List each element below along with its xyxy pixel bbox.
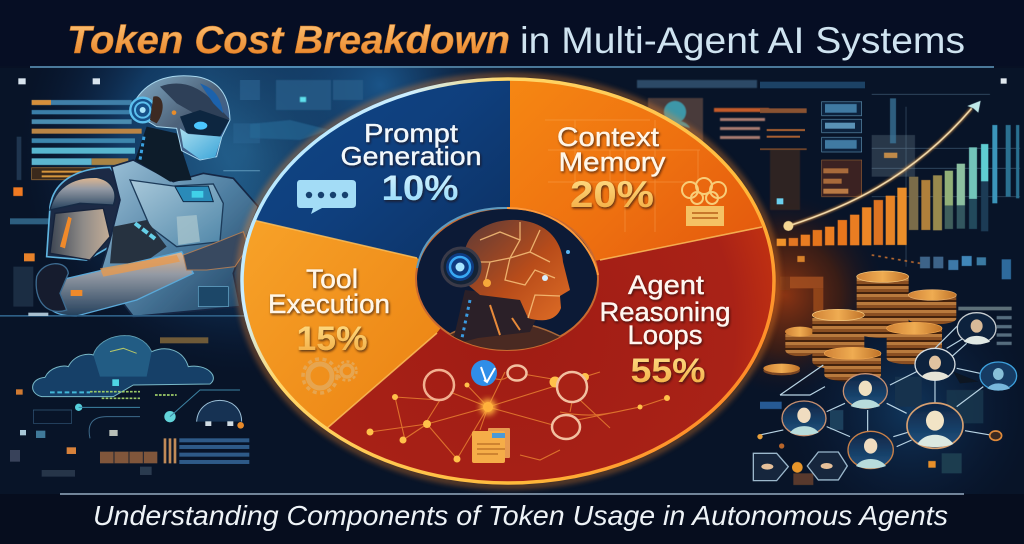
robot hand bbox=[183, 232, 248, 270]
coin stack: front bbox=[824, 347, 881, 382]
robot helmet bbox=[137, 76, 230, 160]
label: context memory bbox=[557, 122, 666, 215]
head shoulders bbox=[449, 325, 561, 350]
top centre tech panel bbox=[250, 80, 363, 140]
loop arrows ring bbox=[424, 370, 454, 400]
folder icon bbox=[472, 428, 510, 463]
label: agent reasoning loops: Agent bbox=[628, 270, 705, 300]
label: tool execution: Execution bbox=[268, 289, 390, 319]
pie rim bbox=[242, 79, 774, 483]
robot chest detail bbox=[130, 180, 223, 247]
hub glow bbox=[480, 399, 496, 415]
robot ear disc bbox=[130, 98, 155, 122]
agent avatar 3 bbox=[980, 362, 1017, 391]
rising arrow bbox=[783, 101, 981, 231]
context memory faint grid bbox=[545, 120, 700, 232]
coin stack: back tall bbox=[857, 271, 909, 338]
check badge bbox=[471, 360, 497, 386]
coin stacks bbox=[763, 271, 956, 382]
pie chart bbox=[232, 70, 782, 492]
cloud outline bbox=[33, 336, 213, 397]
robot neck bbox=[135, 127, 192, 182]
coin stack: middle left bbox=[812, 309, 864, 369]
network nodes bbox=[366, 373, 670, 462]
robot forearm bbox=[43, 252, 193, 316]
network links bbox=[760, 323, 990, 447]
centre hole with head bbox=[416, 208, 598, 360]
cloud network diagram bbox=[0, 313, 260, 477]
growth chart panel bbox=[760, 78, 1020, 279]
robot back arm bbox=[47, 167, 130, 260]
label: agent reasoning loops bbox=[600, 270, 730, 390]
robot illustration bbox=[36, 76, 258, 317]
agent avatar 6 bbox=[848, 431, 893, 469]
hexagon nodes bbox=[753, 452, 847, 481]
agent avatar 5 bbox=[782, 401, 826, 436]
coin stack: back right bbox=[908, 290, 956, 325]
top right tech panel bbox=[637, 80, 800, 210]
slice: tool execution bbox=[244, 221, 440, 428]
label: tool execution bbox=[268, 264, 390, 358]
robot shoulder bbox=[50, 177, 115, 210]
slice: agent reasoning loops bbox=[328, 226, 772, 482]
label: prompt generation: Prompt bbox=[364, 118, 459, 148]
left dashboard panel bbox=[10, 78, 260, 307]
robot torso bbox=[100, 160, 258, 317]
ring nodes bbox=[508, 366, 587, 439]
agent avatar 4 bbox=[843, 374, 887, 408]
title bbox=[67, 19, 965, 62]
coin stack: far left bbox=[785, 327, 815, 356]
label: context memory: Context bbox=[557, 122, 660, 152]
agent avatar 2 bbox=[915, 348, 955, 380]
label: context memory: 20% bbox=[570, 174, 654, 215]
reasoning loop network bbox=[366, 360, 670, 463]
hexagon node marks bbox=[761, 463, 833, 470]
pie slices bbox=[244, 80, 772, 482]
bars bbox=[777, 125, 1019, 246]
icon: context memory bbox=[682, 178, 726, 225]
single coin bbox=[763, 364, 800, 375]
label: prompt generation: 10% bbox=[382, 169, 458, 208]
chart frame bbox=[872, 94, 1020, 267]
head and brain bbox=[462, 220, 570, 320]
subtitle: Understanding Components of Token Usage in Autonomous Agents bbox=[93, 500, 948, 531]
label: agent reasoning loops: 55% bbox=[630, 352, 706, 390]
title: in Multi-Agent AI Systems bbox=[520, 20, 965, 61]
agent network bbox=[753, 313, 1017, 481]
robot face visor bbox=[180, 110, 229, 137]
dashboard widgets bbox=[760, 82, 865, 204]
label: tool execution: 15% bbox=[296, 320, 368, 358]
pie glow bbox=[239, 76, 777, 486]
title: Token Cost Breakdown bbox=[67, 19, 510, 62]
label: context memory: Memory bbox=[558, 147, 666, 177]
label: prompt generation: Generation bbox=[340, 141, 482, 171]
right lower panel backdrop bbox=[760, 277, 1012, 485]
label: tool execution: Tool bbox=[306, 264, 358, 294]
slice: context memory bbox=[510, 80, 762, 261]
agent avatar 1 bbox=[957, 313, 996, 344]
icon: chat bubble bbox=[297, 180, 356, 214]
network links bbox=[370, 372, 667, 460]
head neck bbox=[454, 290, 536, 342]
coin stack: middle right bbox=[887, 322, 942, 365]
agent avatar 7 bbox=[907, 403, 963, 448]
small orange node bbox=[990, 431, 1002, 440]
head ear device bbox=[442, 248, 480, 286]
robot upper arm bbox=[50, 208, 110, 260]
label: agent reasoning loops: Loops bbox=[628, 320, 702, 350]
label: agent reasoning loops: Reasoning bbox=[600, 297, 730, 327]
slice separators bbox=[253, 220, 762, 430]
icon: gears bbox=[303, 359, 356, 393]
slice: prompt generation bbox=[256, 80, 510, 258]
label: prompt generation bbox=[340, 118, 482, 208]
